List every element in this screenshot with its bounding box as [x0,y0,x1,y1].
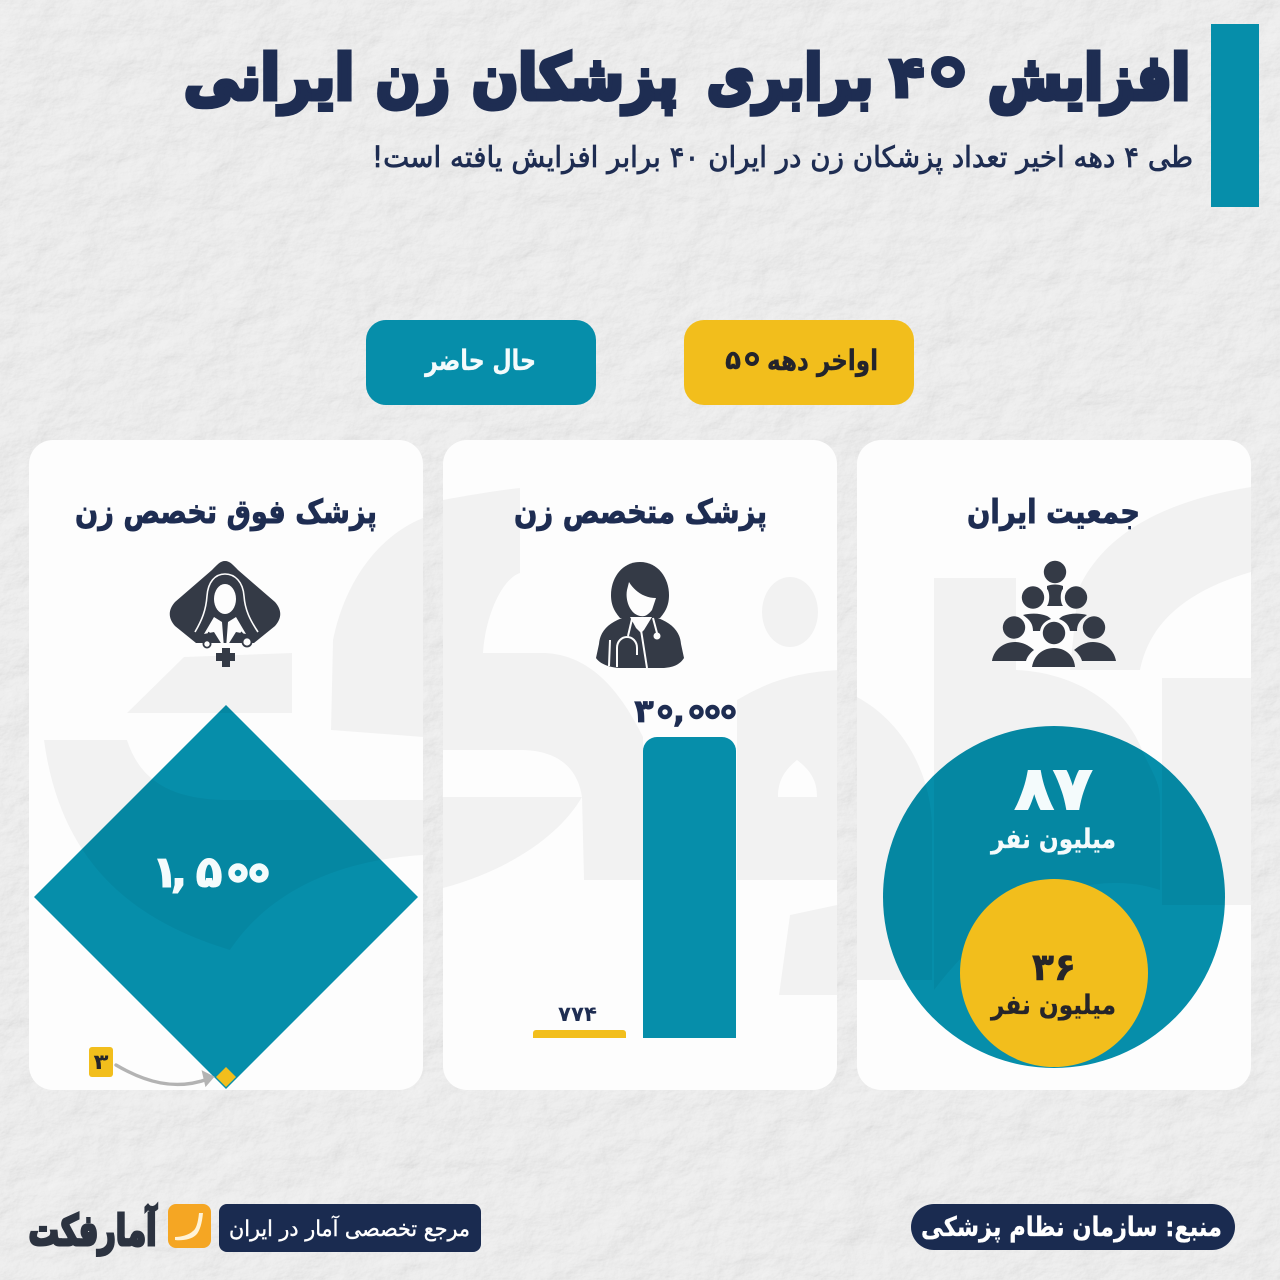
title: پزشکان [472,41,678,114]
logo wordmark: آمارفکت [28,1205,158,1255]
legend: late 1350s: ۵۰ [725,346,760,376]
value: 87 million: میلیون نفر [989,824,1116,855]
title: زن [376,41,450,114]
icon: woman subspecialist [170,561,280,667]
icon: woman doctor [596,562,684,668]
value: 36 million: ۳۶ [1032,945,1076,989]
tagline box: مرجع تخصصی آمار در ایران [229,1215,470,1242]
tagline box [219,1204,481,1252]
watermark logo [44,487,1251,995]
source pill [911,1204,1235,1250]
value: 1500: ۱,۵۰۰ [152,847,272,898]
heading: population: جمعیت ایران [967,492,1140,532]
yellow circle: women population [960,879,1148,1067]
value: 36 million: میلیون نفر [989,990,1116,1021]
icon: crowd [992,561,1116,667]
small yellow diamond: 3 [216,1067,236,1087]
accent bar [1211,24,1259,207]
teal bar: 30000 [643,737,736,1038]
legend: present: حال حاضر [423,344,536,377]
badge: 3: ۳ [94,1050,109,1074]
teal diamond: 1500 [34,705,418,1089]
logo icon [168,1204,211,1248]
heading: specialist: پزشک متخصص زن [514,492,767,532]
panel backgrounds [29,440,1251,1090]
source pill: منبع: سازمان نظام پزشکی [921,1212,1222,1243]
title: افزایش [988,41,1190,114]
title: برابری [707,41,873,114]
value: 30000: ۳۰,۰۰۰ [634,692,738,730]
value: 87 million [989,754,1116,855]
panel: population [967,492,1140,1021]
value: 36 million [989,945,1116,1021]
title [184,41,1190,114]
yellow bar: 774 [533,1030,626,1038]
arrow: from badge to small diamond [116,1065,213,1085]
legend: present [366,320,596,405]
teal circle: population [883,726,1225,1068]
legend: late 1350s: اواخر دهه [767,344,878,377]
title: ۴۰ [889,43,966,111]
value: 87 million: ۸۷ [1015,754,1092,824]
panel: specialist doctors [514,492,767,1026]
title: ایرانی [184,41,354,114]
badge: 3 [89,1047,113,1077]
subtitle: طی ۴ دهه اخیر تعداد پزشکان زن در ایران ۴۰ برابر افزایش یافته است! [372,140,1193,175]
legend: late 1350s [684,320,914,405]
panel: subspecialist doctors [75,492,377,1085]
value: 774: ۷۷۴ [558,1002,597,1026]
heading: subspecialist: پزشک فوق تخصص زن [75,492,377,532]
